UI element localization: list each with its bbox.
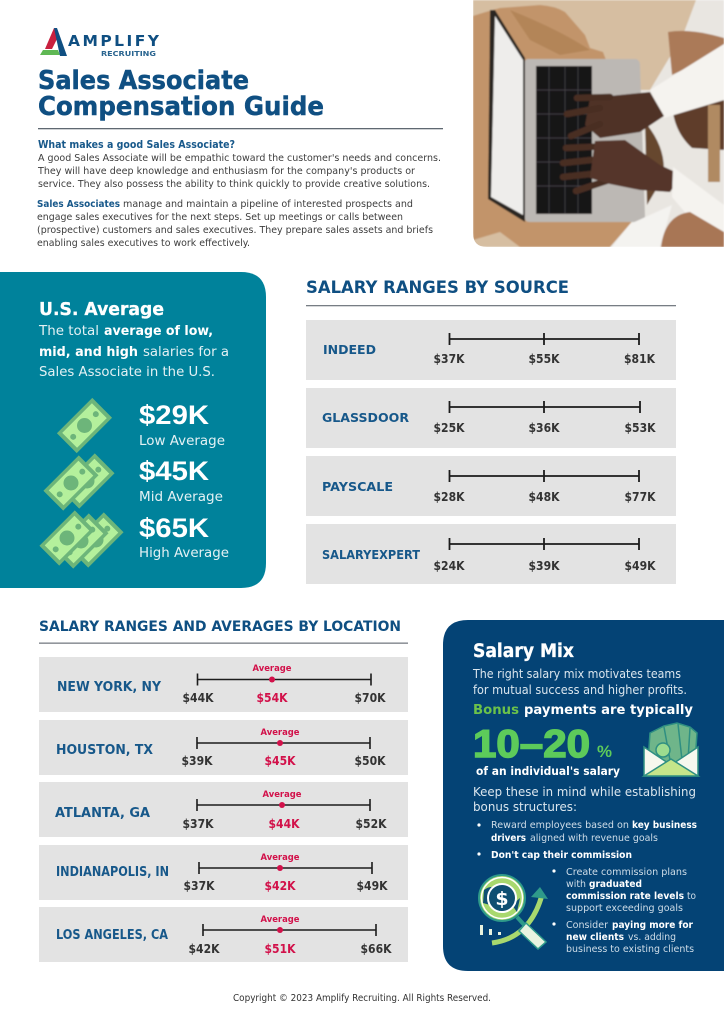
row: Indianapolis [39, 845, 408, 900]
bonus statement [473, 702, 693, 778]
bullet list: commission plans: support exceeding goals [566, 903, 683, 914]
row: Indeed [306, 320, 676, 380]
panel: Salary Mix [443, 620, 724, 971]
row: SalaryExpert: SALARYEXPERT [322, 547, 420, 562]
bullet list: key drivers and commission: drivers [491, 833, 526, 844]
text block: Sales Associates duties: Sales Associates [37, 199, 120, 210]
row: New York: $44K [182, 691, 214, 705]
row: Indeed: $81K [624, 352, 656, 366]
stat: low average [139, 400, 225, 449]
row: Atlanta [39, 782, 408, 837]
row: Houston: $45K [264, 754, 296, 768]
heading: salary ranges by source: SALARY RANGES BY SOURCE [306, 278, 569, 298]
row: Glassdoor: $53K [624, 421, 656, 435]
row: Glassdoor: $36K [528, 421, 560, 435]
description: mid, and high [39, 345, 138, 360]
row: SalaryExpert [306, 524, 676, 584]
row: Glassdoor: $25K [434, 421, 465, 435]
intro text: for mutual success and higher profits. [473, 683, 687, 697]
stat: mid average: $45K [139, 456, 210, 486]
text block: what makes a good Sales Associate: A good Sales Associate will be empathic toward the customer's needs and concerns. [38, 153, 441, 164]
row: PayScale [306, 456, 676, 516]
row: Los Angeles: $66K [360, 942, 392, 956]
text block: what makes a good Sales Associate [37, 139, 441, 190]
description: The total [38, 324, 99, 339]
row: Indianapolis: $49K [356, 879, 388, 893]
row: Indianapolis: INDIANAPOLIS, IN [56, 865, 169, 880]
row: PayScale: $77K [624, 490, 656, 504]
row: New York: NEW YORK, NY [57, 680, 162, 695]
heading: Salary Mix: Salary Mix [473, 641, 574, 662]
bullet list: commission plans: paying more for [612, 920, 693, 931]
description: salaries for a [143, 345, 229, 360]
logo: Amplify Recruiting: AMPLIFY [68, 32, 160, 50]
text: keep these in mind: bonus structures: [473, 800, 577, 814]
text block: what makes a good Sales Associate: service. They also possess the ability to think quickly to provide creative solutions. [38, 179, 430, 190]
stat: high average: $65K [139, 513, 210, 543]
text block: what makes a good Sales Associate: They will have deep knowledge and enthusiasm for the company's products or [37, 166, 416, 177]
row: Atlanta: $44K [268, 817, 300, 831]
copyright: Copyright © 2023 Amplify Recruiting. All Rights Reserved. [233, 993, 491, 1004]
title: Sales Associate [38, 66, 249, 96]
row: Houston [39, 720, 408, 775]
stat: mid average [139, 456, 223, 505]
panel: U.S. Average [0, 272, 266, 588]
bullet list: key drivers and commission: Don't cap their commission [491, 850, 632, 861]
row: Los Angeles: Average [260, 915, 300, 925]
row: New York: Average [252, 664, 292, 674]
row: Houston: $50K [354, 754, 386, 768]
icon: magnifier with dollar and growth arrow [479, 875, 548, 949]
title: Compensation Guide [38, 92, 324, 122]
text block: Sales Associates duties [37, 199, 433, 249]
row: SalaryExpert: $24K [434, 559, 465, 573]
description [38, 324, 229, 380]
row: Houston: HOUSTON, TX [56, 743, 153, 758]
row: PayScale: $48K [528, 490, 560, 504]
row: Atlanta: $52K [356, 817, 387, 831]
description: average of low, [104, 324, 213, 339]
intro text: The right salary mix motivates teams [472, 667, 681, 681]
text block: Sales Associates duties: enabling sales executives to work effectively. [37, 238, 250, 249]
row: New York: $54K [256, 691, 288, 705]
bonus statement: 10–20 [473, 723, 590, 766]
row: SalaryExpert: $39K [528, 559, 560, 573]
bullet list: key drivers and commission: aligned with revenue goals [530, 833, 658, 844]
row: Indeed: INDEED [323, 342, 376, 357]
row: Los Angeles: $51K [264, 942, 296, 956]
row: Indeed: $37K [434, 352, 465, 366]
row: PayScale: PAYSCALE [322, 479, 393, 494]
title [38, 66, 324, 122]
row: Glassdoor [306, 388, 676, 448]
bullet list: commission plans: commission rate levels [566, 891, 684, 902]
icon: magnifier with dollar and growth arrow: $ [495, 888, 509, 910]
bonus statement: of an individual's salary [476, 764, 620, 778]
text block: Sales Associates duties: (prospective) customers and sales executives. They prepare sales assets and briefs [37, 225, 433, 236]
row: Houston: Average [260, 728, 300, 738]
icon: envelope with cash [644, 723, 698, 776]
row: Houston: $39K [182, 754, 213, 768]
row: Atlanta: ATLANTA, GA [55, 806, 150, 821]
row: Indianapolis: Average [260, 853, 300, 863]
bullet list: commission plans: Create commission plans [566, 867, 687, 878]
row: Indianapolis: $37K [184, 879, 215, 893]
bullet list: commission plans: vs. adding [628, 932, 676, 943]
photo: hands typing on laptop [473, 0, 724, 247]
bullet list: commission plans: graduated [589, 879, 642, 890]
bullet list: commission plans: Consider [566, 920, 609, 931]
row: Atlanta: Average [262, 790, 302, 800]
bullet list: commission plans: business to existing clients [566, 944, 694, 955]
row: Glassdoor: GLASSDOOR [322, 410, 409, 425]
row: Los Angeles: $42K [188, 942, 220, 956]
bullet list: key drivers and commission: key business [632, 820, 697, 831]
heading: U.S. Average: U.S. Average [39, 299, 164, 320]
intro text [472, 667, 687, 697]
text: keep these in mind: Keep these in mind while establishing [473, 785, 696, 799]
row: Los Angeles [39, 907, 408, 962]
bullet list: commission plans: new clients [566, 932, 624, 943]
text: keep these in mind [473, 785, 696, 814]
text block: Sales Associates duties: engage sales executives for the next steps. Set up meetings or calls between [37, 212, 403, 223]
text block: Sales Associates duties: manage and maintain a pipeline of interested prospects and [123, 199, 413, 210]
bullet list: commission plans [552, 867, 696, 955]
bullet list: commission plans: with [566, 879, 586, 890]
stat: mid average: Mid Average [139, 490, 223, 505]
row: Los Angeles: LOS ANGELES, CA [56, 928, 168, 943]
bullet list: commission plans: to [687, 891, 696, 902]
icon: three bills [39, 510, 124, 569]
logo: Amplify Recruiting [40, 28, 160, 58]
bullet list: key drivers and commission [477, 820, 697, 861]
row: SalaryExpert: $49K [624, 559, 656, 573]
row: PayScale: $28K [434, 490, 465, 504]
stat: low average: Low Average [139, 434, 225, 449]
logo: Amplify Recruiting: RECRUITING [101, 50, 156, 58]
row: Atlanta: $37K [182, 817, 214, 831]
heading: salary ranges and averages by location: SALARY RANGES AND AVERAGES BY LOCATION [39, 619, 401, 635]
stat: low average: $29K [139, 400, 210, 430]
stat: high average: High Average [139, 546, 229, 561]
bonus statement: Bonus [473, 702, 519, 718]
bullet list: key drivers and commission: Reward employees based on [491, 820, 629, 831]
row: New York: $70K [354, 691, 386, 705]
icon: single bill [57, 398, 112, 453]
stat: high average [139, 513, 229, 561]
text block: what makes a good Sales Associate: What makes a good Sales Associate? [38, 139, 235, 151]
icon: two bills [43, 453, 115, 511]
row: New York [39, 657, 408, 712]
row: Indeed: $55K [528, 352, 560, 366]
description: Sales Associate in the U.S. [39, 365, 215, 380]
row: Indianapolis: $42K [264, 879, 296, 893]
bonus statement: payments are typically [524, 702, 693, 718]
bonus statement: % [597, 742, 612, 761]
